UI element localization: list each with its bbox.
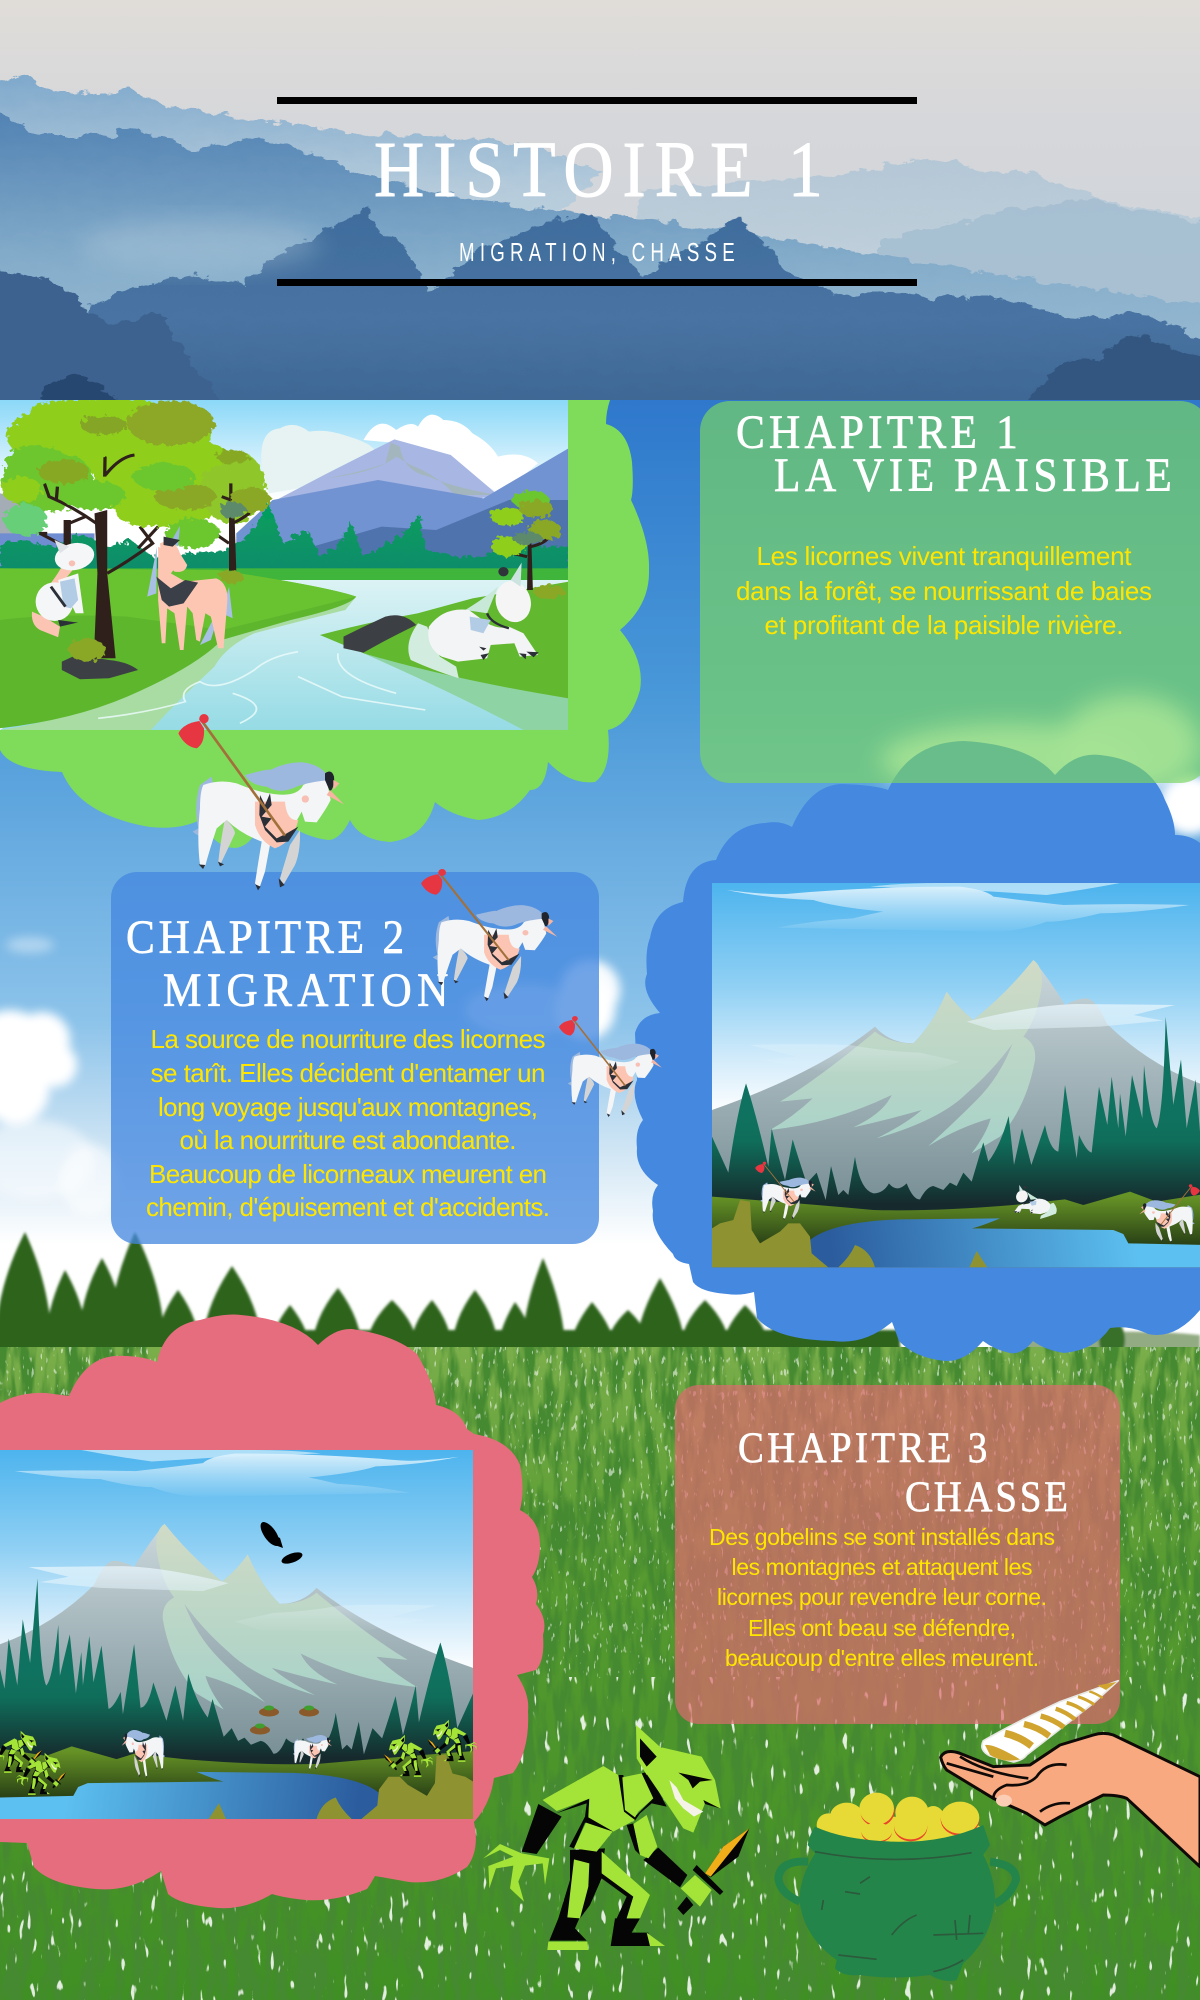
text: chapter 3 body: Elles ont beau se défendre, <box>748 1615 1016 1641</box>
text: chapter 3 body: les montagnes et attaquent les <box>732 1554 1032 1580</box>
heading: chapter 2 <box>126 910 448 1017</box>
left meadow <box>0 568 356 728</box>
background: sky <box>0 400 1200 1360</box>
icon: goblin C <box>384 1735 434 1777</box>
heading: chapter 2: CHAPITRE 2 <box>126 910 404 964</box>
panel: chapter 3 text box <box>675 1385 1120 1724</box>
icon: unicorn B <box>293 1735 332 1770</box>
icon: hand <box>941 1733 1200 1867</box>
text: chapter 2 body: se tarît. Elles décident d'entamer un <box>150 1058 546 1088</box>
icon: unicorn horn <box>982 1681 1118 1762</box>
background: clouds <box>0 695 1200 1216</box>
icon: goblin D <box>428 1720 478 1762</box>
heading: chapter 1 <box>736 405 1172 502</box>
icon: walking unicorn 2 <box>421 869 557 1001</box>
icon: pot of gold <box>778 1793 1016 1981</box>
right meadow <box>320 582 569 698</box>
heading: chapter 3 <box>738 1424 1068 1520</box>
heading: chapter 2: MIGRATION <box>163 963 448 1017</box>
banks <box>0 597 356 730</box>
icon: goblin huts <box>250 1706 319 1734</box>
panel: chapter 2 blue blob underlay <box>635 741 1200 1361</box>
trees <box>2 398 564 662</box>
clouds <box>261 415 538 493</box>
text: chapter 1 body: dans la forêt, se nourrissant de baies <box>736 576 1152 606</box>
icon: goblin B <box>16 1753 66 1795</box>
text: chapter 2 body: Beaucoup de licorneaux meurent en <box>149 1159 547 1189</box>
icon: goblin A <box>0 1731 42 1773</box>
text: chapter 1 body: Les licornes vivent tranquillement <box>756 541 1132 571</box>
title: HISTOIRE 1 <box>374 127 823 214</box>
heading: chapter 3: CHAPITRE 3 <box>738 1424 987 1471</box>
text: chapter 2 body: La source de nourriture des licornes <box>150 1024 546 1054</box>
text: chapter 2 body: long voyage jusqu'aux montagnes, <box>158 1092 538 1122</box>
text: chapter 3 body: licornes pour revendre leur corne. <box>717 1584 1047 1610</box>
icon: unicorn right <box>1139 1184 1200 1243</box>
subtitle: MIGRATION, CHASSE <box>459 237 735 267</box>
text: chapter 3 body <box>709 1524 1055 1671</box>
text: chapter 2 body <box>146 1024 550 1222</box>
text: chapter 3 body: Des gobelins se sont installés dans <box>709 1524 1055 1550</box>
illustration: scene 2 lake and mountain <box>712 883 1200 1267</box>
icon: sitting unicorn <box>32 539 98 637</box>
forest <box>0 502 568 568</box>
background: grass field <box>0 1347 1200 2000</box>
grass band <box>0 568 568 580</box>
sky <box>0 400 569 730</box>
text: chapter 1 body: et profitant de la paisible rivière. <box>764 610 1124 640</box>
icon: pink unicorn <box>147 526 233 650</box>
icon: lying unicorn <box>1014 1185 1057 1219</box>
icon: walking unicorn 3 <box>559 1016 662 1117</box>
icon: walking unicorn 1 <box>178 714 344 890</box>
icon: large goblin <box>483 1725 749 1950</box>
illustration: scene 3 goblins and mountain <box>0 1450 478 1819</box>
text: chapter 3 body: beaucoup d'entre elles meurent. <box>725 1645 1039 1671</box>
river <box>0 580 569 730</box>
river ripples <box>98 652 425 723</box>
illustration: scene 1 river and unicorns <box>0 398 569 737</box>
panel: chapter 3 pink blob <box>0 1315 544 1908</box>
rocks <box>62 615 416 679</box>
heading: chapter 3: CHASSE <box>905 1473 1068 1520</box>
header rule top <box>277 97 917 104</box>
icon: unicorn with bag <box>755 1162 816 1220</box>
header: mountain landscape <box>0 0 1200 430</box>
panel: chapter 2 text box <box>111 872 599 1244</box>
icon: birds <box>257 1519 304 1566</box>
text: chapter 2 body: chemin, d'épuisement et d'accidents. <box>146 1192 550 1222</box>
heading: chapter 1: LA VIE PAISIBLE <box>774 448 1172 502</box>
panel: chapter 1 text box <box>700 401 1200 783</box>
panel: chapter 1 green blob <box>0 400 649 848</box>
background: tree line <box>0 1232 1200 1360</box>
icon: unicorn A <box>122 1730 165 1778</box>
icon: lying unicorn <box>408 563 539 678</box>
text: chapter 1 body <box>736 541 1152 640</box>
header rule bottom <box>277 279 917 286</box>
mountains <box>0 439 569 573</box>
heading: chapter 1: CHAPITRE 1 <box>736 405 1018 459</box>
text: chapter 2 body: où la nourriture est abondante. <box>180 1125 516 1155</box>
